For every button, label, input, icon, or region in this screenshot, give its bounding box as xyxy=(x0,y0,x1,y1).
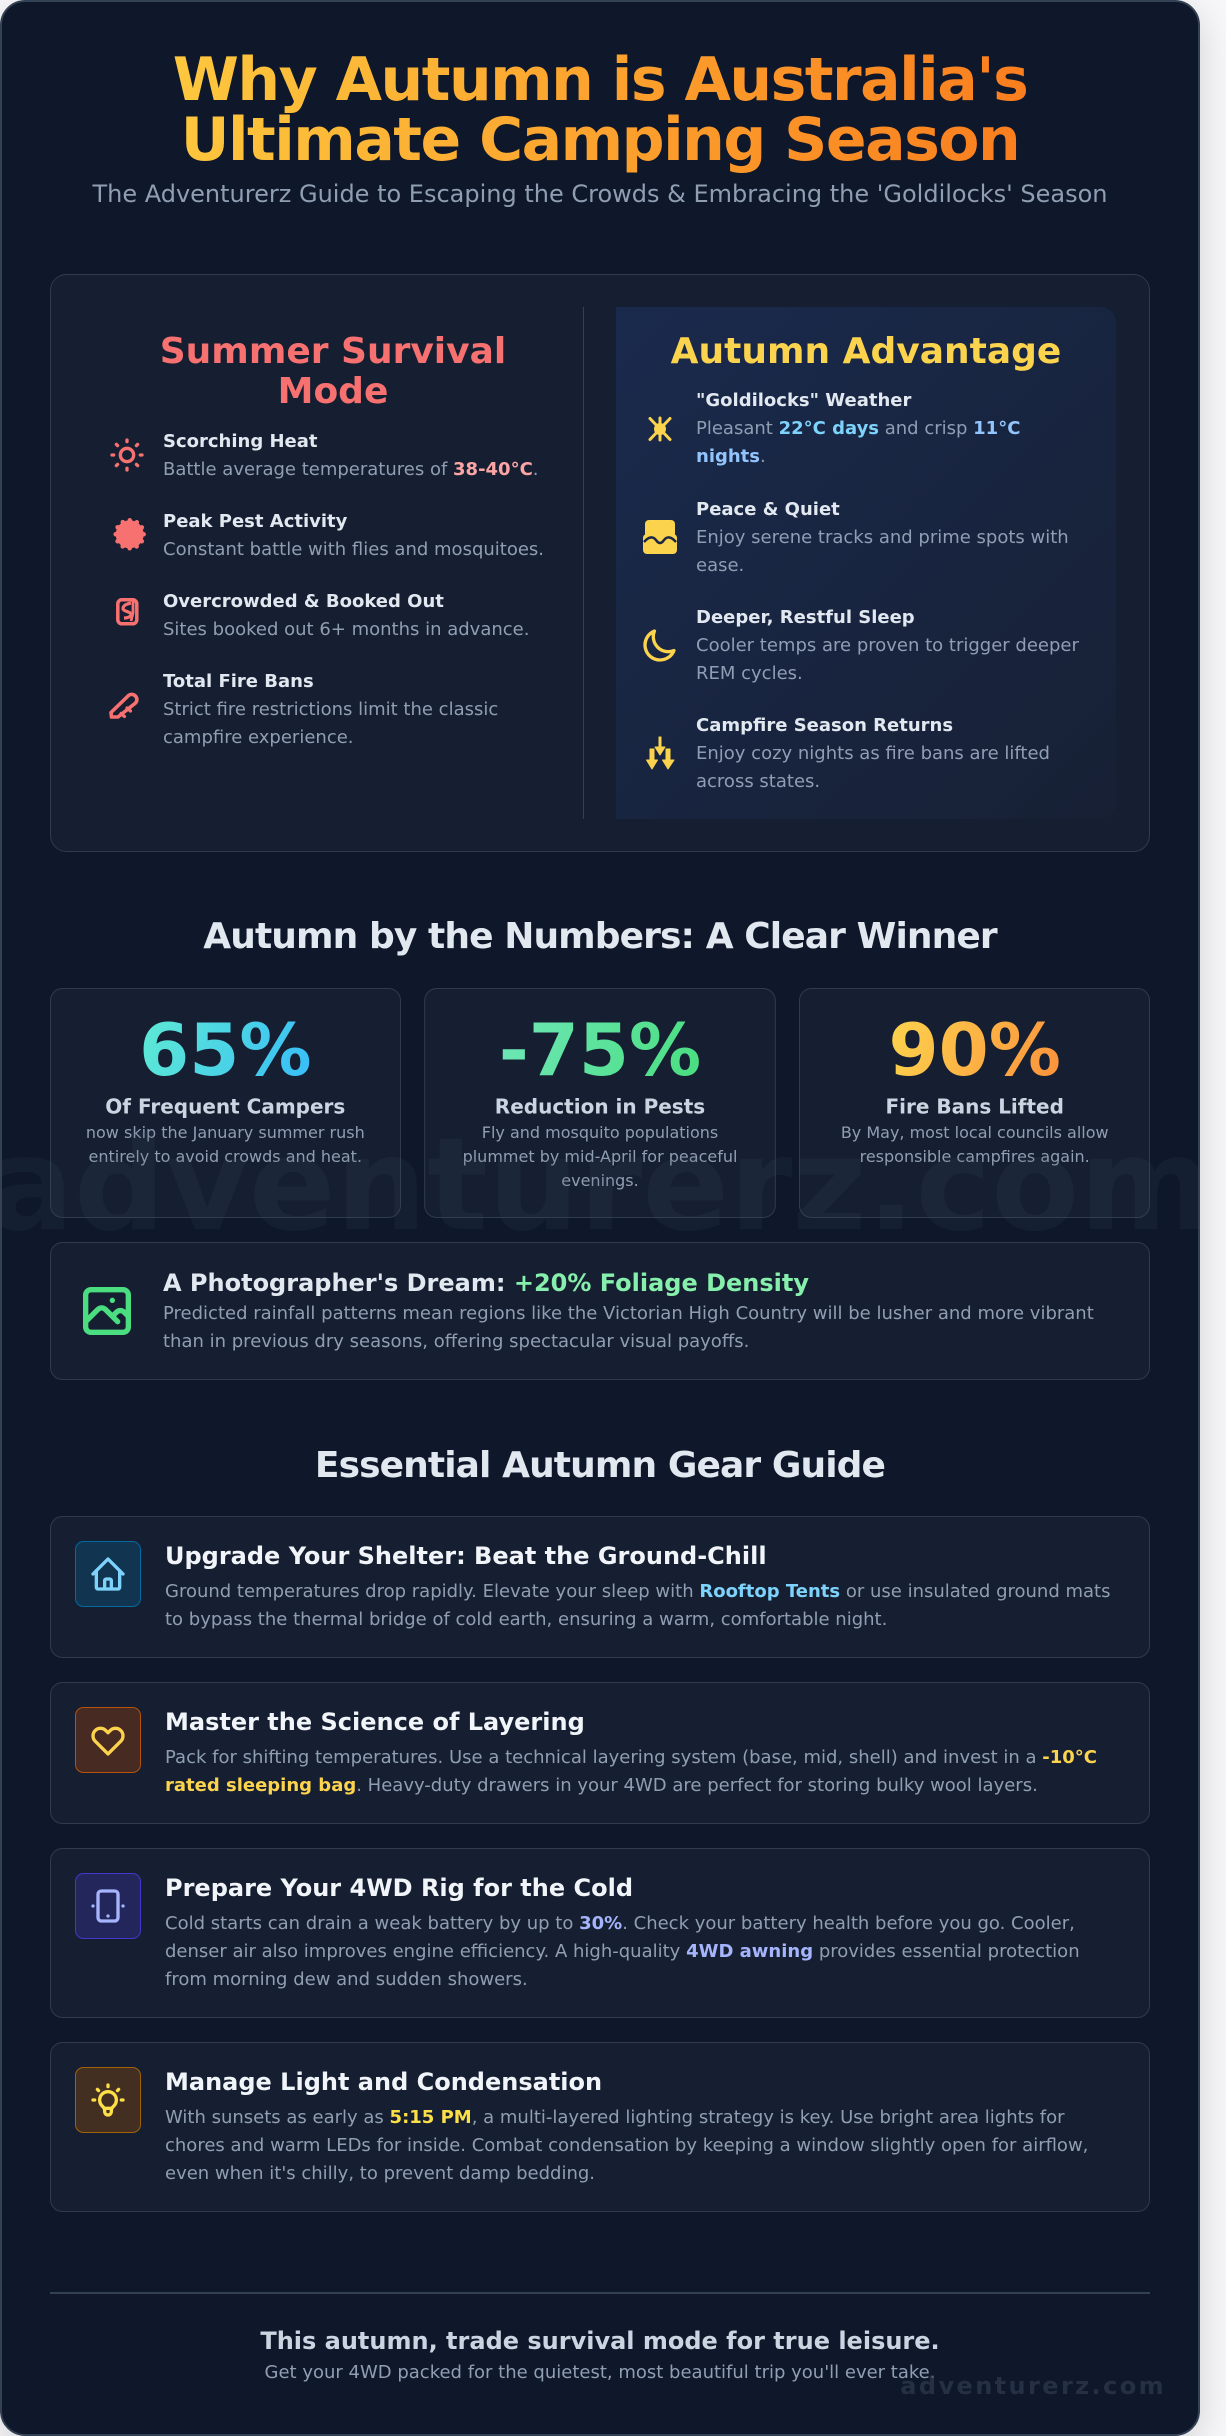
icon: badge xyxy=(116,520,144,548)
stat card: 90%: Fire Bans Lifted xyxy=(885,1094,1064,1118)
autumn item: campfire season: Campfire Season Returns xyxy=(696,715,953,736)
summer item: scorching heat xyxy=(112,431,539,480)
gear card: 4WD rig: from morning dew and sudden showers. xyxy=(165,1969,528,1990)
summer item: overcrowded: Sites booked out 6+ months in advance. xyxy=(163,619,529,640)
summer item: overcrowded xyxy=(118,591,529,640)
icon: sun xyxy=(110,438,144,472)
summer item: total fire bans xyxy=(111,671,498,748)
heading: summer survival mode xyxy=(160,331,506,412)
gear card: layering xyxy=(50,1682,1150,1824)
summer item: peak pest activity: Peak Pest Activity xyxy=(163,511,348,532)
watermark: large adventurerz.com: adventurerz.com xyxy=(0,1111,1213,1260)
stat card: 65%: Of Frequent Campers xyxy=(105,1094,345,1118)
summer item: peak pest activity xyxy=(116,511,544,560)
summer item: peak pest activity: Constant battle with flies and mosquitoes. xyxy=(163,539,544,560)
heading: autumn advantage: Autumn Advantage xyxy=(671,331,1061,372)
panel: photographer's dream: A Photographer's Dream: +20% Foliage Density xyxy=(163,1269,809,1297)
icon: booking xyxy=(118,600,137,624)
stat card: 90%: 90% xyxy=(889,1008,1061,1092)
icon: photograph xyxy=(83,1287,131,1335)
autumn item: peace and quiet: ease. xyxy=(696,555,744,576)
gear card: layering: Pack for shifting temperatures. Use a technical layering system (base, mid, shell) and invest in a -10°C xyxy=(165,1747,1097,1768)
icon: tray xyxy=(643,520,677,554)
gear card: light and condensation: With sunsets as early as 5:15 PM, a multi-layered lighting strategy is key. Use bright area lights for xyxy=(165,2107,1065,2128)
title: Why Autumn is Australia's xyxy=(173,45,1027,115)
stat card: 90%: By May, most local councils allow xyxy=(841,1123,1109,1142)
stat card: -75%: Fly and mosquito populations xyxy=(482,1123,718,1142)
stat card: 90%: responsible campfires again. xyxy=(860,1147,1090,1166)
stat card: 65%: now skip the January summer rush xyxy=(86,1123,365,1142)
gear card: shelter: Ground temperatures drop rapidly. Elevate your sleep with Rooftop Tents or use insulated ground mats xyxy=(165,1581,1110,1602)
footer: Get your 4WD packed for the quietest, most beautiful trip you'll ever take. xyxy=(265,2362,935,2383)
autumn item: deeper sleep: REM cycles. xyxy=(696,663,803,684)
autumn item: campfire season xyxy=(646,715,1050,792)
autumn item: campfire season: Enjoy cozy nights as fire bans are lifted xyxy=(696,743,1050,764)
icon: home xyxy=(76,1542,140,1606)
icon: light bulb xyxy=(76,2068,140,2132)
stat card: -75%: Reduction in Pests xyxy=(495,1094,705,1118)
autumn item: peace and quiet: Enjoy serene tracks and prime spots with xyxy=(696,527,1069,548)
gear card: layering: rated sleeping bag. Heavy-duty drawers in your 4WD are perfect for storing bulky wool layers. xyxy=(165,1775,1038,1796)
gear card: 4WD rig xyxy=(50,1848,1150,2018)
stat card: -75% xyxy=(425,988,775,1218)
icon: star sun xyxy=(650,418,670,440)
title: Ultimate Camping Season xyxy=(181,105,1019,175)
autumn item: deeper sleep: Cooler temps are proven to trigger deeper xyxy=(696,635,1079,656)
autumn item: deeper sleep: Deeper, Restful Sleep xyxy=(696,607,915,628)
icon: battery device xyxy=(76,1874,140,1938)
stat card: -75%: -75% xyxy=(499,1008,701,1092)
autumn item: goldilocks weather: "Goldilocks" Weather xyxy=(696,390,911,411)
gear card: shelter: to bypass the thermal bridge of cold earth, ensuring a warm, comfortable night. xyxy=(165,1609,887,1630)
heading: summer survival mode: Mode xyxy=(278,371,388,412)
summer item: overcrowded: Overcrowded & Booked Out xyxy=(163,591,444,612)
stat card: 65%: entirely to avoid crowds and heat. xyxy=(89,1147,362,1166)
heading: autumn by the numbers: Autumn by the Numbers: A Clear Winner xyxy=(203,916,998,957)
panel: photographer's dream xyxy=(50,1242,1150,1380)
gear card: 4WD rig: denser air also improves engine efficiency. A high-quality 4WD awning provides essential protection xyxy=(165,1941,1080,1962)
stat card: -75%: plummet by mid-April for peaceful xyxy=(463,1147,737,1166)
gear card: 4WD rig: Cold starts can drain a weak battery by up to 30%. Check your battery health before you go. Cooler, xyxy=(165,1913,1075,1934)
autumn item: peace and quiet xyxy=(643,499,1069,576)
summer item: total fire bans: Total Fire Bans xyxy=(163,671,314,692)
panel: photographer's dream: than in previous dry seasons, offering spectacular visual payoffs. xyxy=(163,1331,749,1352)
watermark: small adventurerz.com: adventurerz.com xyxy=(900,2372,1166,2400)
title xyxy=(173,45,1027,175)
stat card: 65%: 65% xyxy=(139,1008,311,1092)
gear card: shelter xyxy=(50,1516,1150,1658)
gear card: light and condensation xyxy=(50,2042,1150,2212)
summer item: total fire bans: campfire experience. xyxy=(163,727,354,748)
autumn item: peace and quiet: Peace & Quiet xyxy=(696,499,840,520)
stat card: 65% xyxy=(50,988,400,1218)
icon: arrows xyxy=(646,737,674,769)
autumn item: goldilocks weather: nights. xyxy=(696,446,766,467)
autumn item: campfire season: across states. xyxy=(696,771,820,792)
summer item: total fire bans: Strict fire restrictions limit the classic xyxy=(163,699,498,720)
footer: This autumn, trade survival mode for true leisure. xyxy=(260,2327,940,2355)
subtitle: The Adventurerz Guide to Escaping the Crowds & Embracing the 'Goldilocks' Season xyxy=(91,180,1108,208)
icon: heart xyxy=(76,1708,140,1772)
footer xyxy=(50,2292,1150,2383)
autumn item: goldilocks weather xyxy=(650,390,1020,467)
heading: essential autumn gear guide: Essential Autumn Gear Guide xyxy=(315,1445,885,1486)
summer item: scorching heat: Battle average temperatures of 38-40°C. xyxy=(163,459,539,480)
panel: photographer's dream: Predicted rainfall patterns mean regions like the Victorian High Country will be lusher and more vibrant xyxy=(163,1303,1094,1324)
stat card: -75%: evenings. xyxy=(561,1171,639,1190)
panel: summer vs autumn comparison xyxy=(50,274,1150,852)
icon: moon xyxy=(643,629,676,662)
stat card: 90% xyxy=(800,988,1150,1218)
heading: summer survival mode: Summer Survival xyxy=(160,331,506,372)
gear card: 4WD rig: Prepare Your 4WD Rig for the Cold xyxy=(165,1874,633,1902)
summer item: scorching heat: Scorching Heat xyxy=(163,431,318,452)
gear card: shelter: Upgrade Your Shelter: Beat the Ground-Chill xyxy=(165,1542,767,1570)
gear card: layering: Master the Science of Layering xyxy=(165,1708,585,1736)
gear card: light and condensation: even when it's chilly, to prevent damp bedding. xyxy=(165,2163,595,2184)
gear card: light and condensation: Manage Light and Condensation xyxy=(165,2068,602,2096)
autumn panel background xyxy=(616,307,1116,819)
autumn item: deeper sleep xyxy=(645,607,1079,684)
gear card: light and condensation: chores and warm LEDs for inside. Combat condensation by keeping a window slightly open for airflow, xyxy=(165,2135,1088,2156)
icon: match xyxy=(111,694,137,717)
autumn item: goldilocks weather: Pleasant 22°C days and crisp 11°C xyxy=(696,418,1020,439)
divider xyxy=(583,307,584,819)
